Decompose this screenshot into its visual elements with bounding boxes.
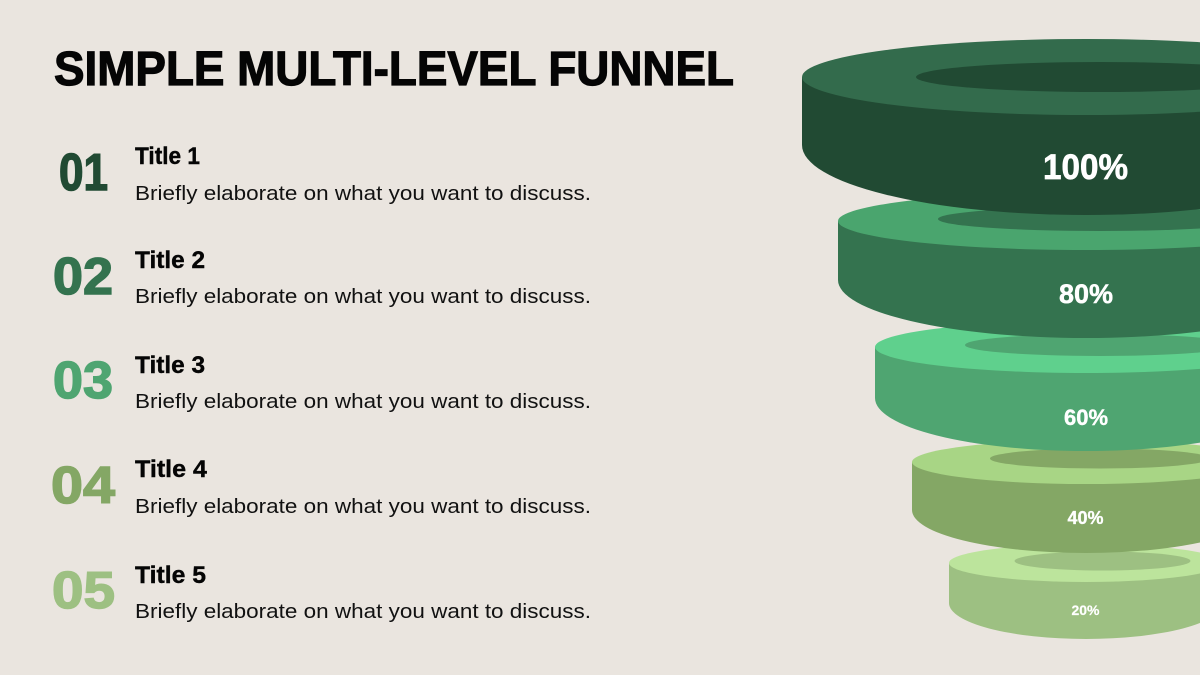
item 1 [59,143,591,205]
item 4 [51,456,591,518]
funnel level 60% [875,321,1200,451]
funnel level 40% [912,440,1200,553]
item 2 description: Briefly elaborate on what you want to discuss. [135,285,591,308]
funnel level 20% [949,544,1200,639]
funnel level 40%: 40% [1067,508,1104,528]
funnel level 60%: 60% [1064,405,1108,430]
item 2 title: Title 2 [135,247,205,274]
funnel level 80% [838,192,1200,338]
funnel level 100%: 100% [1043,148,1128,187]
list of items [51,143,591,623]
item 4 title: Title 4 [135,456,208,483]
item 3 title: Title 3 [135,352,205,379]
number 04: 04 [51,457,115,515]
item 4 description: Briefly elaborate on what you want to discuss. [135,495,591,518]
item 5 [52,562,591,623]
funnel level 100% [802,39,1200,215]
item 3 [53,352,591,413]
number 02: 02 [53,248,113,306]
funnel chart [802,39,1200,639]
number 05: 05 [52,562,115,620]
title: SIMPLE MULTI-LEVEL FUNNEL [54,43,734,96]
item 5 title: Title 5 [135,562,206,589]
item 1 title: Title 1 [135,143,200,170]
funnel level 80%: 80% [1059,279,1113,309]
item 2 [53,247,591,308]
item 1 description: Briefly elaborate on what you want to discuss. [135,182,591,205]
item 3 description: Briefly elaborate on what you want to discuss. [135,390,591,413]
funnel level 20%: 20% [1071,602,1100,618]
item 5 description: Briefly elaborate on what you want to discuss. [135,600,591,623]
number 03: 03 [53,352,113,410]
number 01: 01 [59,144,108,202]
